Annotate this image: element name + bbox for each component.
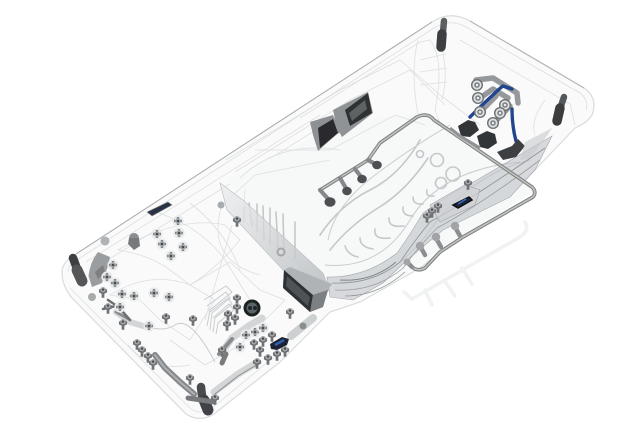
seat jets bbox=[88, 202, 269, 353]
pipe jets upper bbox=[320, 160, 382, 207]
steps bbox=[204, 286, 234, 334]
top panels bbox=[310, 92, 373, 151]
seating area contours bbox=[110, 203, 285, 366]
pipe jets lower bbox=[404, 222, 460, 267]
dark top-left panel bbox=[147, 202, 172, 216]
lounge arcs bbox=[345, 150, 460, 257]
pump manifold bbox=[450, 78, 525, 160]
corner post: right bbox=[557, 97, 564, 121]
small jet fittings bbox=[99, 216, 294, 405]
heater box bbox=[283, 267, 332, 312]
U-shaped pipe bbox=[320, 115, 535, 270]
corner post: bottom bbox=[201, 387, 208, 410]
tub wall front bbox=[327, 136, 552, 300]
fan-shaped cover bbox=[88, 252, 110, 287]
tub wall left bbox=[220, 183, 330, 291]
round filter bbox=[244, 300, 260, 316]
corner post: left bbox=[73, 258, 82, 281]
ghost reflection of pipe bbox=[404, 222, 527, 305]
control buttons and blue display bbox=[423, 179, 472, 223]
corner post: top bbox=[441, 21, 444, 47]
side valve bbox=[128, 233, 140, 250]
side wing panel bbox=[520, 128, 552, 160]
wall fitting bbox=[276, 248, 286, 256]
deep tub basin contours bbox=[222, 60, 536, 290]
blue control pad bbox=[270, 337, 289, 350]
manifold hoses bbox=[103, 300, 313, 402]
